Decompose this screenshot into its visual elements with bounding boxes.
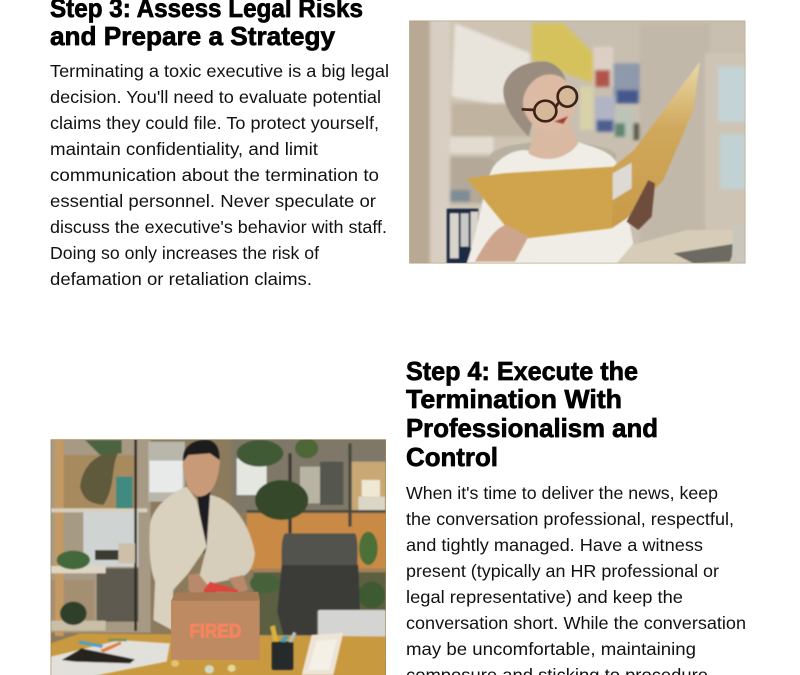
text block: step 3 body: claims they could file. To protect yourself, — [50, 113, 379, 133]
text block: step 3 body: communication about the termination to — [50, 165, 379, 185]
text block: step 3 body: defamation or retaliation claims. — [50, 269, 312, 289]
text block: step 4 body: legal representative) and keep the — [406, 587, 683, 607]
text block: step 3 body — [50, 61, 389, 289]
binders — [447, 61, 745, 264]
chair — [281, 533, 358, 565]
text block: step 3 body: essential personnel. Never speculate or — [50, 191, 376, 211]
box — [171, 592, 260, 660]
face — [523, 74, 575, 132]
back wall and shelves — [51, 439, 151, 633]
box: FIRED — [189, 621, 241, 642]
heading: step 3 — [50, 0, 363, 51]
text block: step 3 body: Doing so only increases the risk of — [50, 243, 319, 263]
text block: step 4 body: When it's time to deliver the news, keep — [406, 483, 718, 503]
man — [149, 440, 255, 630]
text block: step 3 body: decision. You'll need to evaluate potential — [50, 87, 381, 107]
folder — [467, 62, 700, 262]
image: woman reading a folder — [400, 17, 750, 270]
shirt — [467, 142, 633, 263]
heading: step 4: Professionalism and — [406, 413, 658, 443]
text block: step 4 body — [406, 483, 746, 675]
heading: step 3: and Prepare a Strategy — [50, 21, 336, 51]
text block: step 4 body: and tightly managed. Have a witness — [406, 535, 703, 555]
image: man packing a fired box — [51, 438, 386, 675]
pen cup and frame — [171, 625, 343, 675]
heading: step 4: Termination With — [406, 384, 622, 414]
text block: step 3 body: Terminating a toxic executive is a big legal — [50, 61, 389, 81]
papers — [51, 639, 170, 675]
hands — [475, 225, 528, 262]
text block: step 4 body: the conversation professional, respectful, — [406, 509, 734, 529]
hair back — [503, 61, 567, 137]
text block: step 4 body: may be uncomfortable, maintaining — [406, 639, 696, 659]
books and objects — [116, 477, 133, 508]
plants — [80, 450, 120, 505]
desk — [51, 633, 386, 675]
text block: step 3 body: discuss the executive's behavior with staff. — [50, 217, 387, 237]
laptop — [600, 230, 745, 263]
heading: step 4: Control — [406, 442, 498, 472]
text block: step 3 body: maintain confidentiality, and limit — [50, 139, 318, 159]
glasses — [522, 87, 577, 121]
text block: step 4 body: conversation short. While the conversation — [406, 613, 746, 633]
laptop — [318, 610, 386, 660]
heading: step 4 — [406, 356, 658, 472]
shelf rails — [55, 439, 64, 636]
neck — [528, 123, 578, 159]
heading: step 4: Step 4: Execute the — [406, 356, 638, 386]
text block: step 4 body: present (typically an HR professional or — [406, 561, 719, 581]
